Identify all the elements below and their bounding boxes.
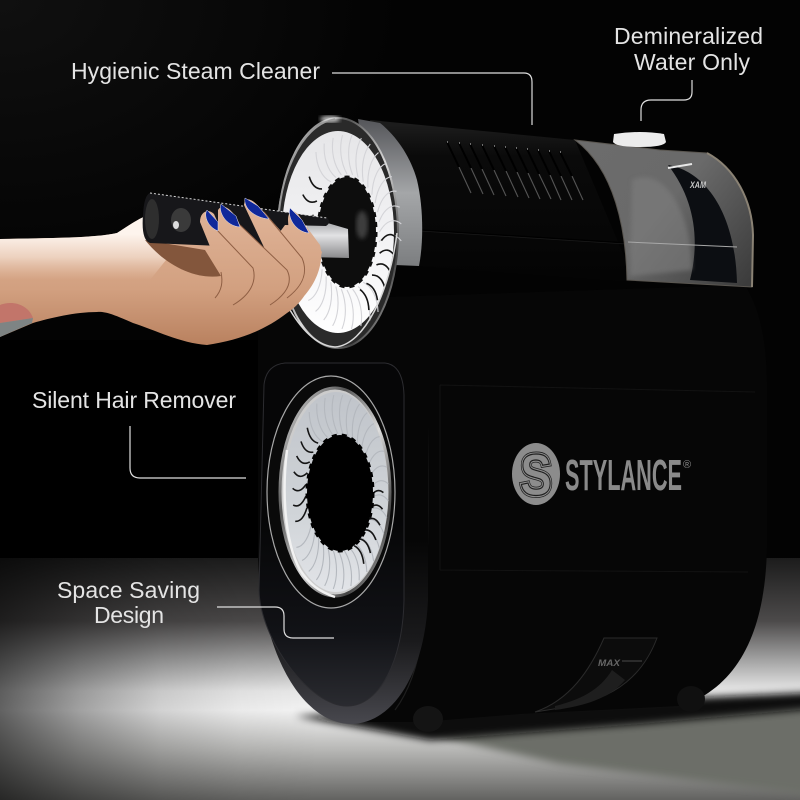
front lower band bbox=[258, 300, 428, 724]
tank outer rim bbox=[707, 153, 753, 287]
label: demineralized water only bbox=[614, 23, 763, 121]
fingers bbox=[200, 199, 321, 310]
label text: Silent Hair Remover bbox=[32, 387, 236, 413]
registered mark: ® bbox=[683, 459, 691, 471]
tattoo bbox=[0, 303, 33, 337]
label text: Hygienic Steam Cleaner bbox=[71, 58, 320, 84]
water level window with MAX mark: MAX bbox=[598, 658, 621, 668]
tank top highlights bbox=[668, 164, 692, 168]
front panel bbox=[259, 363, 404, 706]
central opening with plug bbox=[318, 177, 376, 287]
cylinder housing bbox=[370, 120, 635, 282]
palm shadow bbox=[145, 240, 221, 277]
leader line bbox=[641, 80, 692, 121]
vent slits bbox=[447, 142, 583, 200]
feet bbox=[413, 686, 705, 732]
label text: Space Saving bbox=[57, 577, 200, 603]
chrome ring bbox=[278, 118, 398, 348]
silver band bbox=[358, 119, 422, 266]
device main body bbox=[300, 285, 767, 722]
fan blades bbox=[293, 395, 389, 589]
upper cylinder: hygienic steam cleaner bbox=[277, 116, 753, 348]
label: silent hair remover bbox=[32, 387, 246, 478]
background bbox=[0, 0, 800, 560]
tank level line bbox=[628, 242, 737, 247]
outer dark ring bbox=[267, 376, 395, 608]
chrome highlight bbox=[285, 450, 335, 597]
logo mark: S bbox=[520, 443, 552, 508]
lower fan unit: silent hair remover bbox=[267, 376, 395, 608]
water tank bbox=[575, 140, 753, 287]
label text: Water Only bbox=[634, 49, 750, 75]
tank inner dark reservoir bbox=[668, 165, 737, 283]
leader line bbox=[332, 73, 532, 125]
label: hygienic steam cleaner bbox=[71, 58, 532, 125]
tank highlight dome bbox=[630, 177, 692, 276]
leader line bbox=[217, 607, 334, 638]
blue nails bbox=[206, 198, 309, 233]
brush handle bbox=[143, 193, 329, 248]
tank scale text: XAM bbox=[689, 180, 706, 190]
highlight along the arm bbox=[0, 216, 170, 280]
chrome ring bbox=[280, 388, 390, 596]
label text: Design bbox=[94, 602, 164, 628]
white fan disc bbox=[284, 392, 388, 592]
lit floor bbox=[0, 558, 800, 800]
filler cap bbox=[613, 132, 666, 147]
white fan disc bbox=[282, 131, 394, 333]
water level window with MAX mark bbox=[535, 638, 657, 712]
logo mark: S bbox=[520, 443, 552, 508]
brush tube bbox=[307, 217, 349, 258]
logo mark: S bbox=[520, 443, 552, 508]
label text: Demineralized bbox=[614, 23, 763, 49]
finger creases bbox=[215, 212, 305, 305]
arm and back of hand bbox=[0, 216, 322, 345]
rim glint bbox=[320, 116, 340, 122]
label: space saving design bbox=[57, 577, 334, 638]
product infographic: STYLANCE bbox=[565, 451, 682, 500]
hand holding the brush bbox=[0, 193, 329, 345]
central opening bbox=[307, 435, 373, 551]
leader line bbox=[130, 426, 246, 478]
fan blades bbox=[298, 135, 402, 329]
